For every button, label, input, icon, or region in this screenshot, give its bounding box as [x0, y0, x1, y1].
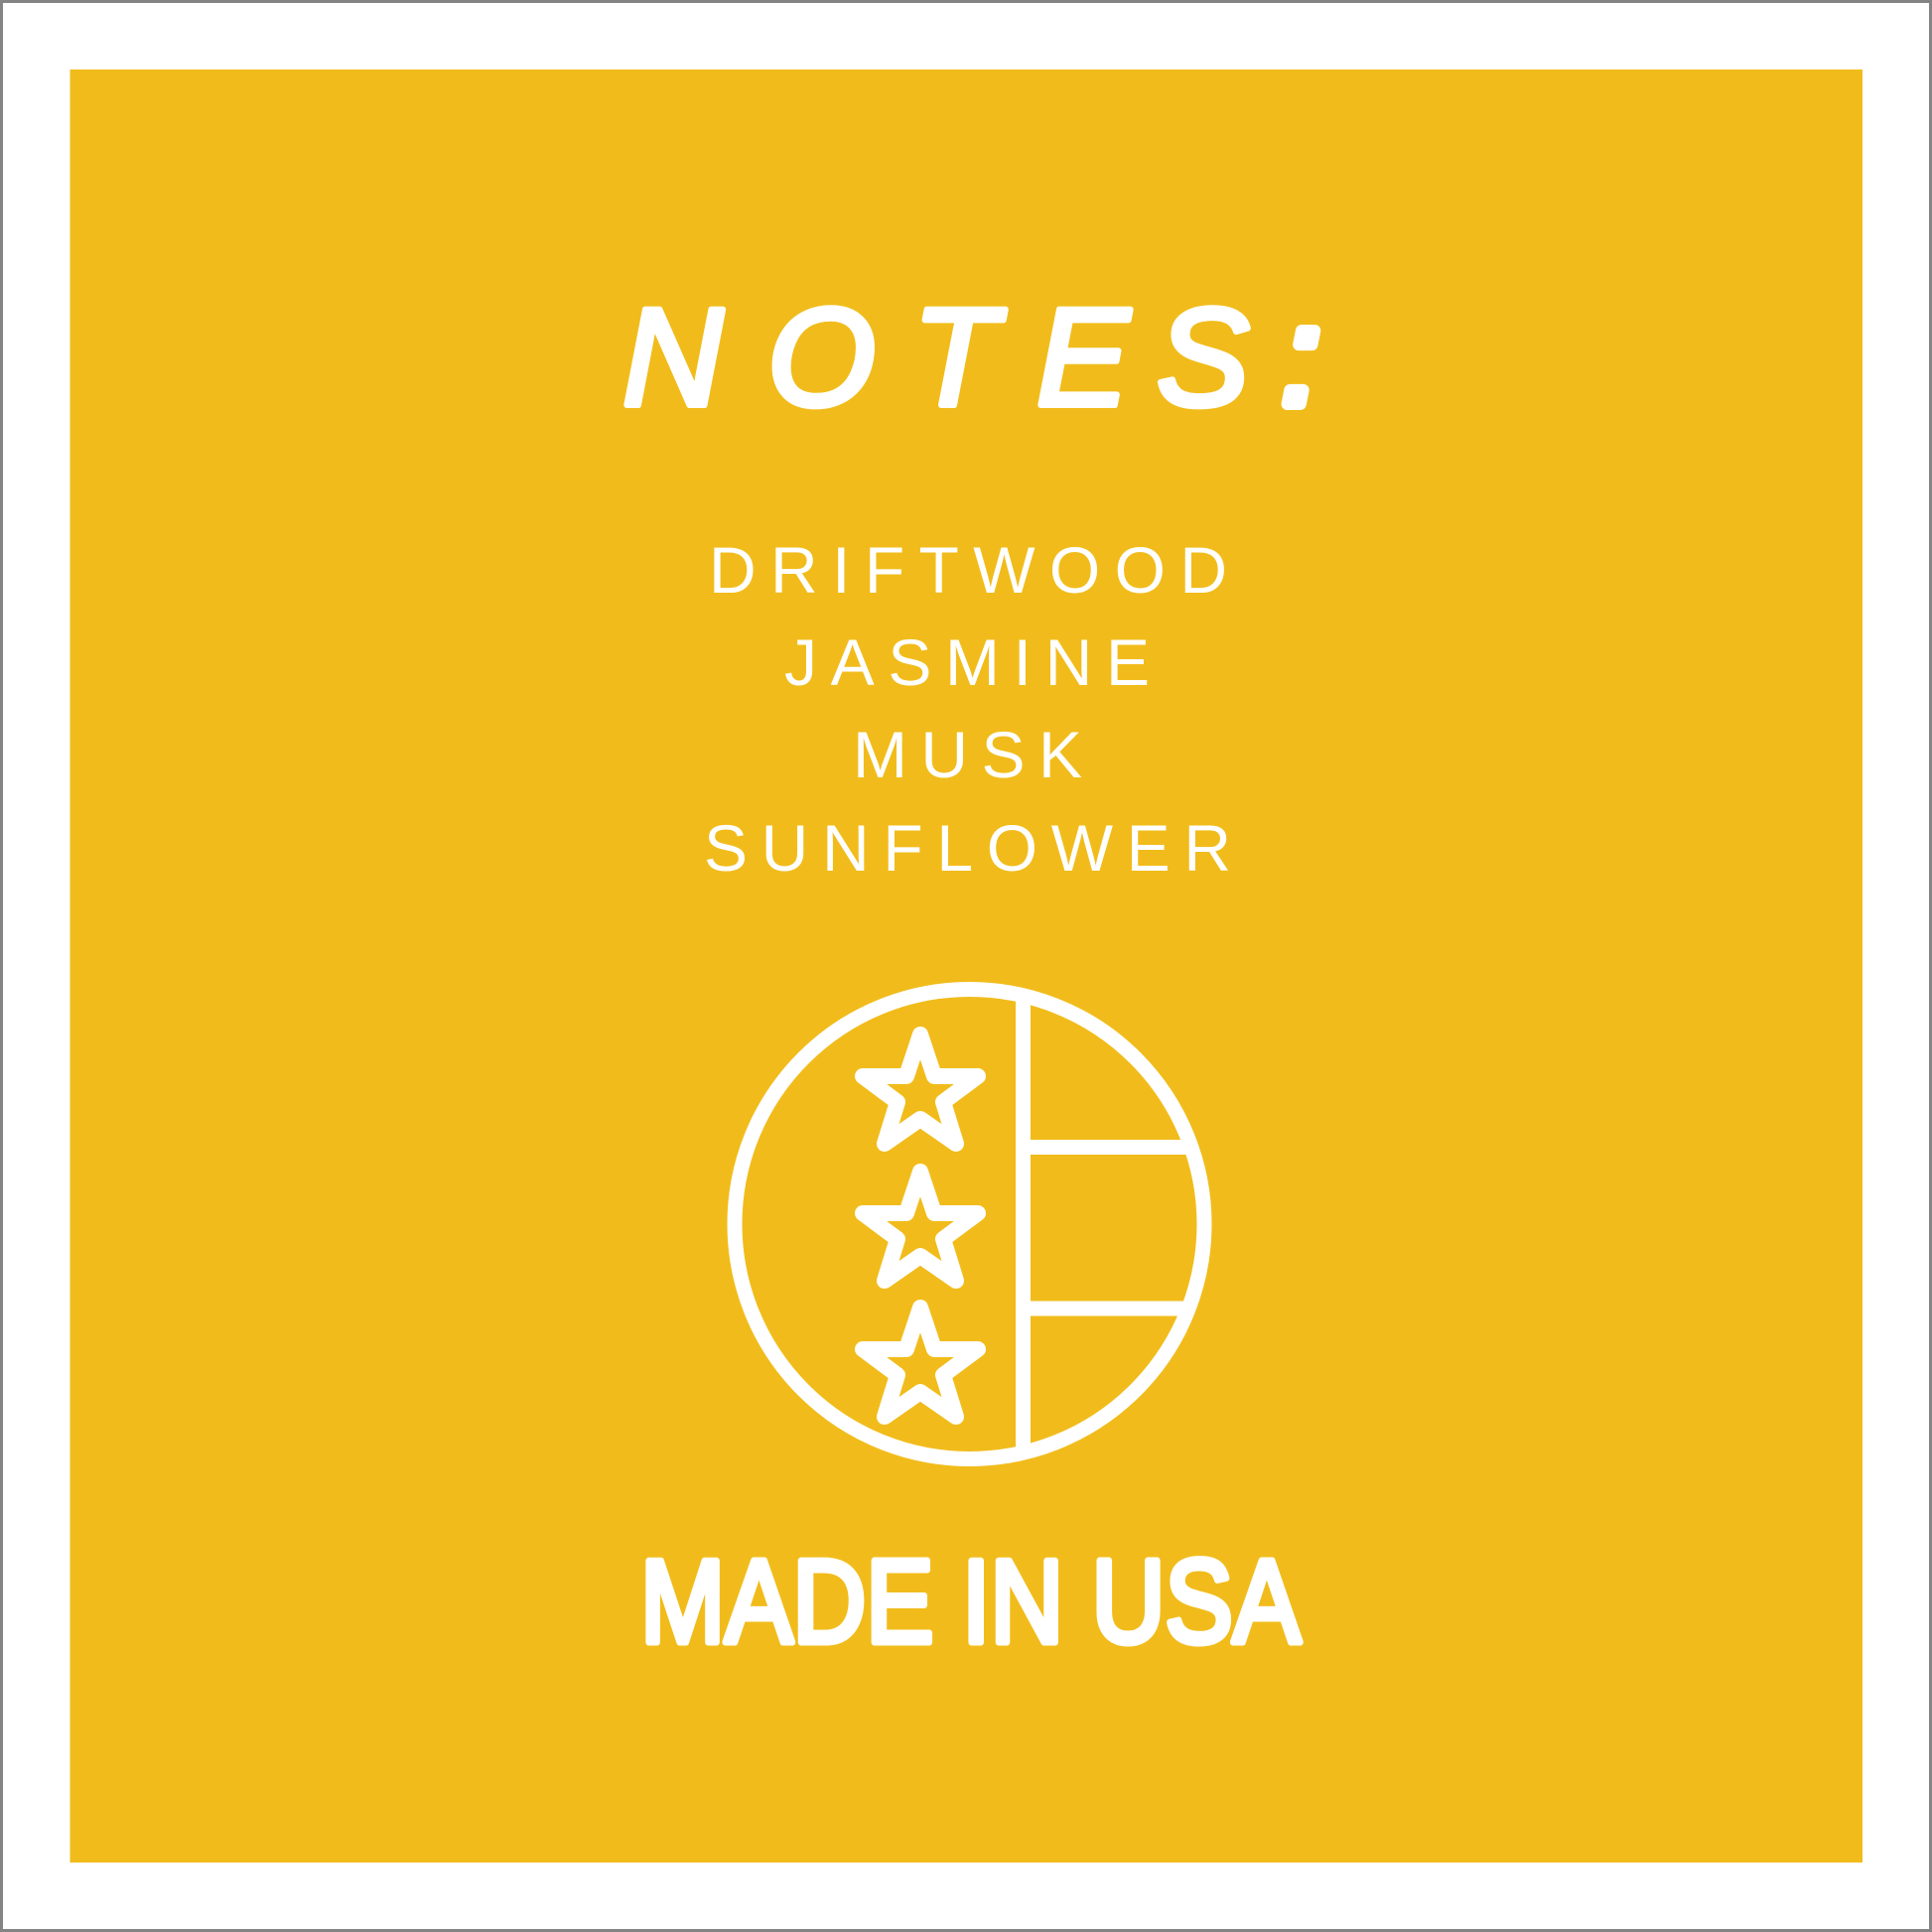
text block: scent notes: DRIFTWOOD	[709, 533, 1227, 607]
label: made in usa: MADE IN USA	[640, 1536, 1302, 1668]
icon: star bottom	[863, 1308, 978, 1417]
heading: notes: NOTES	[622, 279, 1249, 435]
text block: scent notes: SUNFLOWER	[704, 811, 1231, 885]
icon: star top	[863, 1035, 978, 1144]
text block: scent notes: MUSK	[853, 718, 1082, 791]
icon: star middle	[863, 1172, 978, 1281]
heading: notes: :	[1282, 278, 1320, 434]
text block: scent notes	[704, 533, 1231, 885]
icon: american flag globe	[735, 989, 1204, 1459]
text block: scent notes: JASMINE	[784, 625, 1150, 699]
